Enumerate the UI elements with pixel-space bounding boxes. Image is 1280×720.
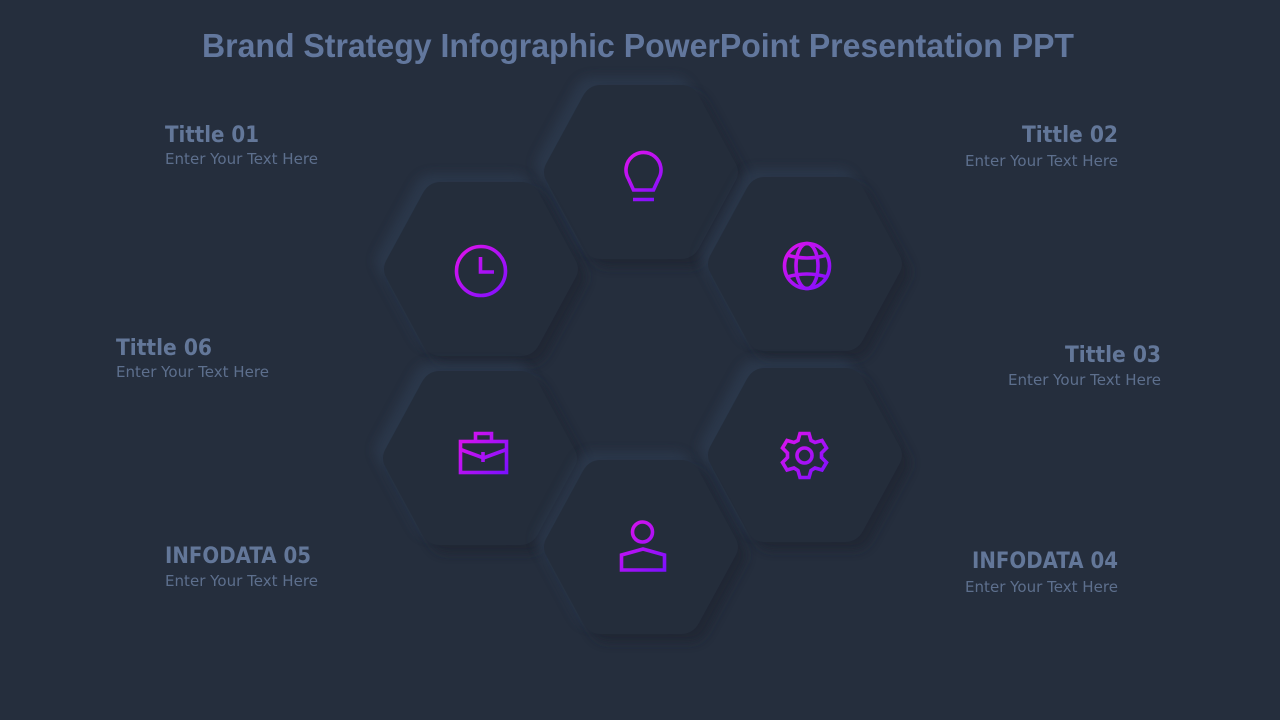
- icon: gear: [782, 434, 826, 478]
- hexagon: lower right, gear: [700, 360, 910, 550]
- label: Tittle 02: [965, 123, 1118, 170]
- label: Tittle 06: Enter Your Text Here: [116, 363, 269, 381]
- label: Tittle 01: [165, 123, 318, 168]
- label: INFODATA 04: INFODATA 04: [972, 549, 1118, 574]
- label: INFODATA 05: INFODATA 05: [165, 544, 311, 569]
- icon: briefcase: [460, 434, 506, 472]
- label: Tittle 01: Tittle 01: [165, 123, 259, 148]
- hexagon: upper left, clock: [376, 174, 586, 364]
- label: INFODATA 04: Enter Your Text Here: [965, 578, 1118, 596]
- title: Brand Strategy Infographic PowerPoint Presentation PPT: [202, 27, 1074, 64]
- label: Tittle 02: Enter Your Text Here: [965, 152, 1118, 170]
- label: Tittle 03: [1008, 343, 1161, 389]
- icon: lightbulb: [626, 152, 661, 200]
- hexagon: bottom, person: [536, 452, 746, 642]
- label: Tittle 03: Enter Your Text Here: [1008, 371, 1161, 389]
- label: Tittle 06: Tittle 06: [116, 336, 212, 361]
- label: Tittle 01: Enter Your Text Here: [165, 150, 318, 168]
- hexagon: upper right, globe: [700, 169, 910, 359]
- icon: clock: [456, 246, 506, 296]
- label: INFODATA 04: [965, 549, 1118, 596]
- hexagon: lower left, briefcase: [375, 363, 585, 553]
- label: Tittle 06: [116, 336, 269, 381]
- label: Tittle 02: Tittle 02: [1022, 123, 1118, 148]
- label: INFODATA 05: [165, 544, 318, 590]
- hexagon: top, lightbulb: [536, 77, 746, 267]
- icon: person: [622, 522, 664, 570]
- icon: globe: [784, 244, 830, 288]
- label: INFODATA 05: Enter Your Text Here: [165, 572, 318, 590]
- label: Tittle 03: Tittle 03: [1065, 343, 1161, 368]
